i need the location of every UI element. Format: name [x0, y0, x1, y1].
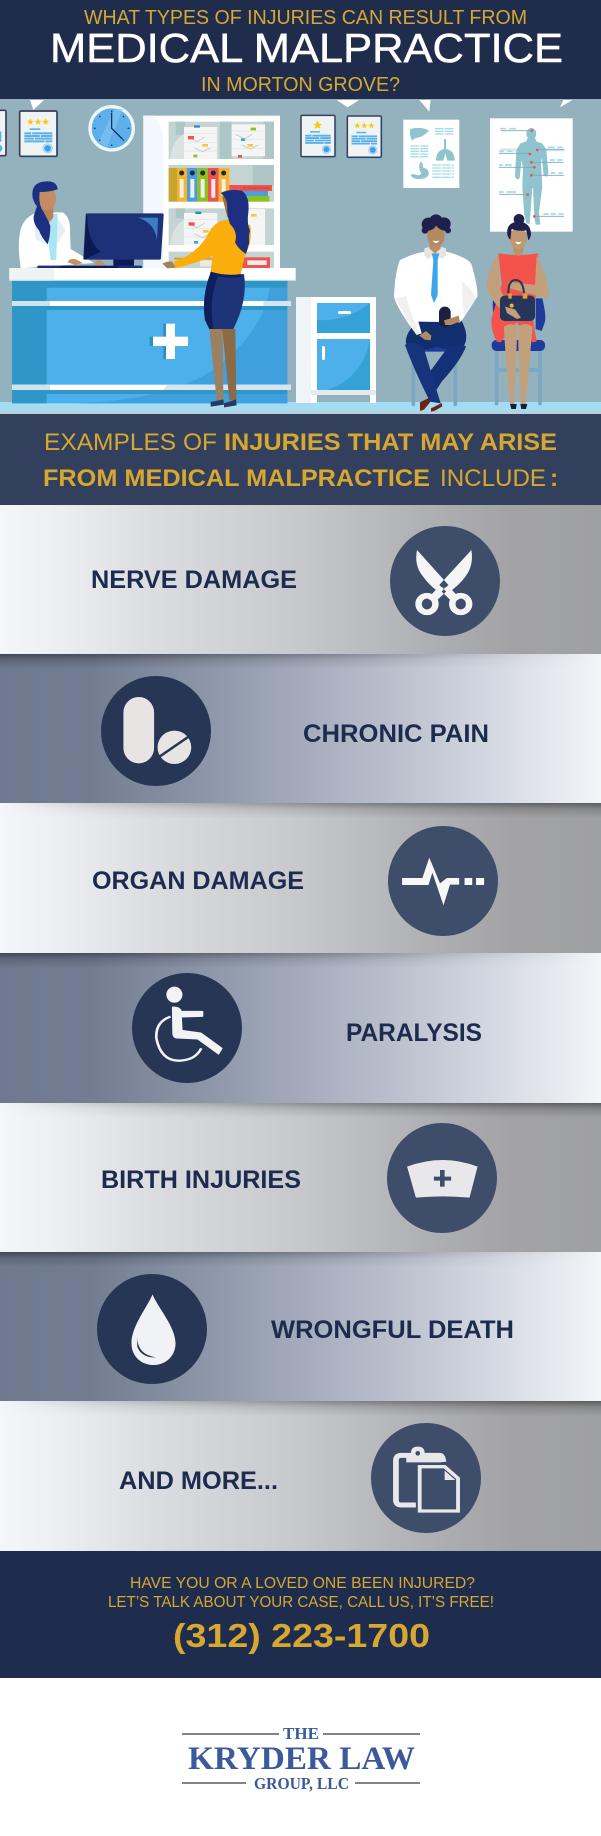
certificate three stars — [20, 111, 59, 158]
heading line two: FROM MEDICAL MALPRACTICE — [43, 465, 430, 492]
computer monitor and keyboard — [37, 213, 164, 270]
doctor receptionist — [19, 181, 106, 268]
seated man — [394, 214, 477, 412]
books — [229, 185, 272, 191]
certificate one star — [301, 115, 337, 158]
item: and more: AND MORE... — [119, 1467, 278, 1495]
poster: body diagram — [490, 118, 573, 232]
heading line one — [44, 429, 557, 456]
lower body — [204, 273, 245, 407]
icon: heartbeat — [388, 826, 498, 936]
item: nerve damage — [0, 505, 601, 654]
heading line one: INJURIES THAT MAY ARISE — [224, 429, 557, 456]
reception desk — [9, 268, 296, 403]
wall items right: certificates and posters — [301, 100, 573, 232]
prompt line one: HAVE YOU OR A LOVED ONE BEEN INJURED? — [130, 1575, 475, 1592]
certificate partial — [0, 110, 6, 156]
item: organ damage: ORGAN DAMAGE — [92, 867, 304, 895]
item: wrongful death — [0, 1252, 601, 1401]
icon: blood drop — [97, 1274, 207, 1384]
icon: scissors — [390, 526, 500, 636]
header banner — [0, 0, 601, 99]
heading line two: INCLUDE — [440, 465, 546, 492]
item: paralysis: PARALYSIS — [346, 1019, 482, 1047]
icon: wheelchair — [132, 973, 242, 1083]
heading line two: : — [550, 465, 558, 492]
logo: the kryder law group: THE — [283, 1724, 319, 1743]
illustration: clinic waiting room — [0, 99, 601, 414]
header line: what types of injuries: WHAT TYPES OF INJURIES CAN RESULT FROM — [84, 6, 527, 29]
binders — [169, 168, 177, 202]
side cabinet — [296, 297, 376, 403]
icon: nurse cap — [387, 1123, 497, 1233]
certificate three stars right — [347, 116, 383, 159]
icon: pills — [101, 676, 211, 786]
item: paralysis — [0, 953, 601, 1103]
section heading band — [0, 414, 601, 505]
item: nerve damage: NERVE DAMAGE — [91, 566, 297, 594]
call to action footer — [0, 1551, 601, 1678]
wall items left: certificates, clock, shelves — [0, 100, 280, 270]
heading line one: EXAMPLES OF — [44, 429, 217, 456]
icon: clipboard — [371, 1423, 481, 1533]
item: organ damage — [0, 803, 601, 953]
logo: the kryder law group: KRYDER LAW — [188, 1741, 415, 1777]
shelving unit — [143, 116, 280, 269]
item: chronic pain — [0, 654, 601, 803]
poster: organs — [403, 120, 459, 188]
logo: the kryder law group: GROUP, LLC — [254, 1774, 349, 1793]
prompt line two: LET’S TALK ABOUT YOUR CASE, CALL US, IT’S FREE! — [108, 1594, 494, 1611]
title: medical malpractice: MEDICAL MALPRACTICE — [50, 25, 563, 71]
logo: the kryder law group — [182, 1724, 420, 1793]
item: birth injuries: BIRTH INJURIES — [101, 1166, 301, 1194]
wall background — [0, 99, 601, 414]
files — [184, 127, 217, 159]
wall clock — [88, 105, 135, 152]
waiting patients — [394, 214, 549, 412]
patient woman at desk — [162, 190, 251, 407]
item: birth injuries — [0, 1103, 601, 1252]
floor — [0, 402, 601, 414]
cross symbol on desk — [150, 324, 188, 359]
header line: in morton grove: IN MORTON GROVE? — [201, 73, 400, 96]
item: wrongful death: WRONGFUL DEATH — [271, 1316, 514, 1344]
upper body — [162, 190, 251, 278]
seated woman — [487, 214, 549, 409]
phone number: (312) 223-1700 — [173, 1617, 430, 1654]
item: chronic pain: CHRONIC PAIN — [303, 720, 489, 748]
item: and more — [0, 1401, 601, 1551]
